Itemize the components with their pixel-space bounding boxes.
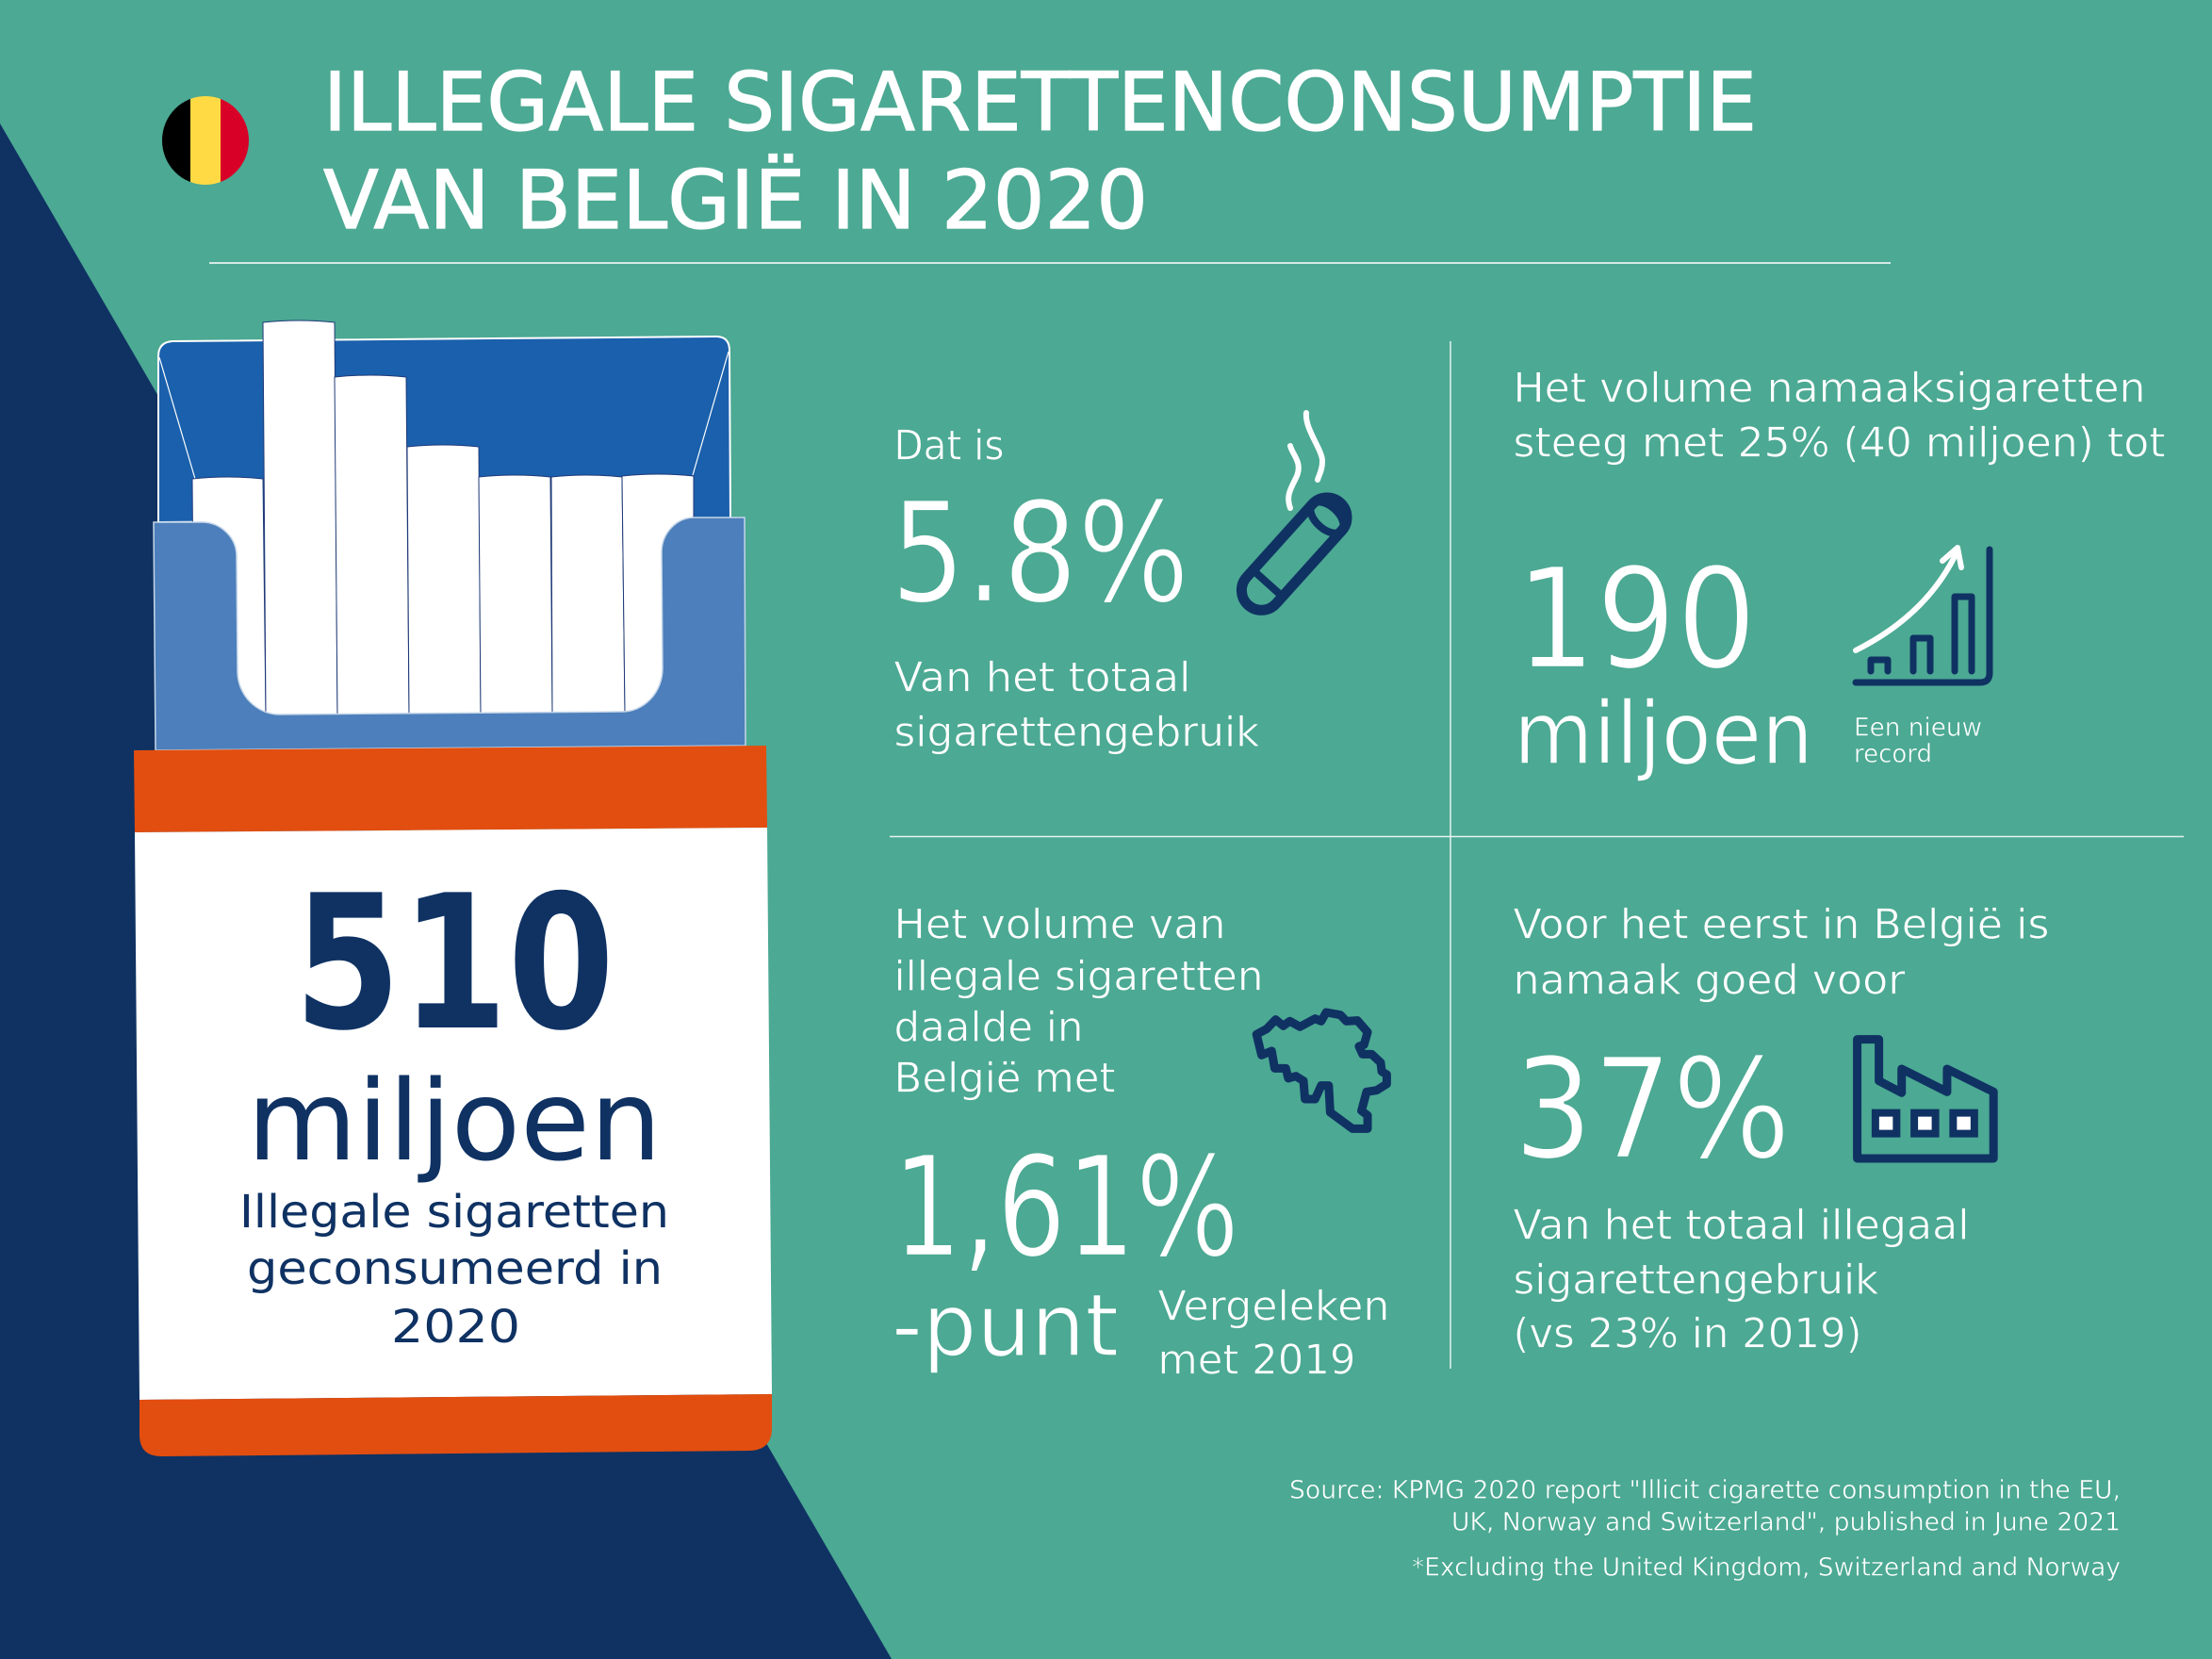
panel: 190 miljoen: Een nieuw [1854, 713, 1982, 743]
pack front flap with cutout [154, 517, 746, 750]
pack white label [135, 828, 772, 1400]
panel: 1,61%-punt: 1,61% [893, 1126, 1239, 1289]
panel: 37%: sigarettengebruik [1514, 1256, 1879, 1305]
panel: 190 miljoen: miljoen [1514, 683, 1813, 784]
panel: 1,61%-punt: illegale sigaretten [893, 952, 1263, 1001]
panel: 190 miljoen: Het volume namaaksigaretten [1514, 364, 2145, 413]
icon: Belgian flag [160, 94, 251, 189]
cigarette pack illustration [134, 320, 772, 1456]
icon: rising bar chart [1856, 548, 1990, 682]
panel: 5.8%: Dat is [893, 422, 1005, 469]
source notes: Source: KPMG 2020 report "Illicit cigarette consumption in the EU, [1289, 1476, 2121, 1504]
icon: map of Belgium [1256, 1012, 1386, 1128]
panel: 1,61%-punt: België met [893, 1054, 1116, 1103]
title: ILLEGALE SIGARETTENCONSUMPTIE [323, 56, 1757, 150]
pack orange top band [134, 746, 767, 832]
panel: 1,61%-punt [892, 901, 1389, 1384]
pack main figure: miljoen [247, 1056, 662, 1186]
panel: 190 miljoen: steeg met 25% (40 miljoen) tot [1514, 419, 2166, 468]
source notes: UK, Norway and Switzerland", published in June 2021 [1451, 1508, 2121, 1536]
source notes [1289, 1476, 2121, 1582]
panel: 190 miljoen: record [1854, 739, 1932, 769]
panel: 37%: (vs 23% in 2019) [1514, 1310, 1862, 1357]
panel: 1,61%-punt: met 2019 [1157, 1337, 1355, 1384]
panel: 37%: namaak goed voor [1514, 956, 1906, 1005]
panel: 5.8%: 5.8% [891, 472, 1189, 634]
panel: 1,61%-punt: Het volume van [893, 901, 1225, 948]
pack orange bottom band [139, 1394, 772, 1456]
panel: 190 miljoen: 190 [1516, 538, 1757, 700]
panel: 1,61%-punt: daalde in [893, 1003, 1084, 1052]
title [323, 56, 1757, 248]
pack main figure: 510 [294, 856, 614, 1072]
icon: smoking cigarette [1234, 413, 1355, 618]
panel: 5.8% [891, 422, 1260, 756]
pack main figure: Illegale sigaretten [239, 1186, 669, 1239]
icon: factory [1858, 1040, 1993, 1158]
pack main figure [239, 856, 669, 1354]
panel: 37%: Van het totaal illegaal [1514, 1201, 1970, 1250]
panel: 5.8%: sigarettengebruik [893, 709, 1260, 756]
panel: 190 miljoen [1514, 364, 2166, 784]
panel: 37%: 37% [1514, 1028, 1791, 1191]
panel: 1,61%-punt: Vergeleken [1157, 1282, 1389, 1331]
panel: 37%: Voor het eerst in België is [1514, 901, 2049, 948]
pack inner lid [158, 337, 730, 522]
navy diagonal background [0, 123, 892, 1659]
cigarettes [192, 320, 694, 716]
title: VAN BELGIË IN 2020 [323, 154, 1148, 248]
source notes: *Excluding the United Kingdom, Switzerland and Norway [1412, 1553, 2121, 1582]
panel: 5.8%: Van het totaal [893, 654, 1191, 701]
pack main figure: 2020 [391, 1301, 520, 1354]
panel: 1,61%-punt: -punt [892, 1275, 1119, 1376]
panel: 37% [1514, 901, 2049, 1357]
pack main figure: geconsumeerd in [247, 1242, 663, 1295]
